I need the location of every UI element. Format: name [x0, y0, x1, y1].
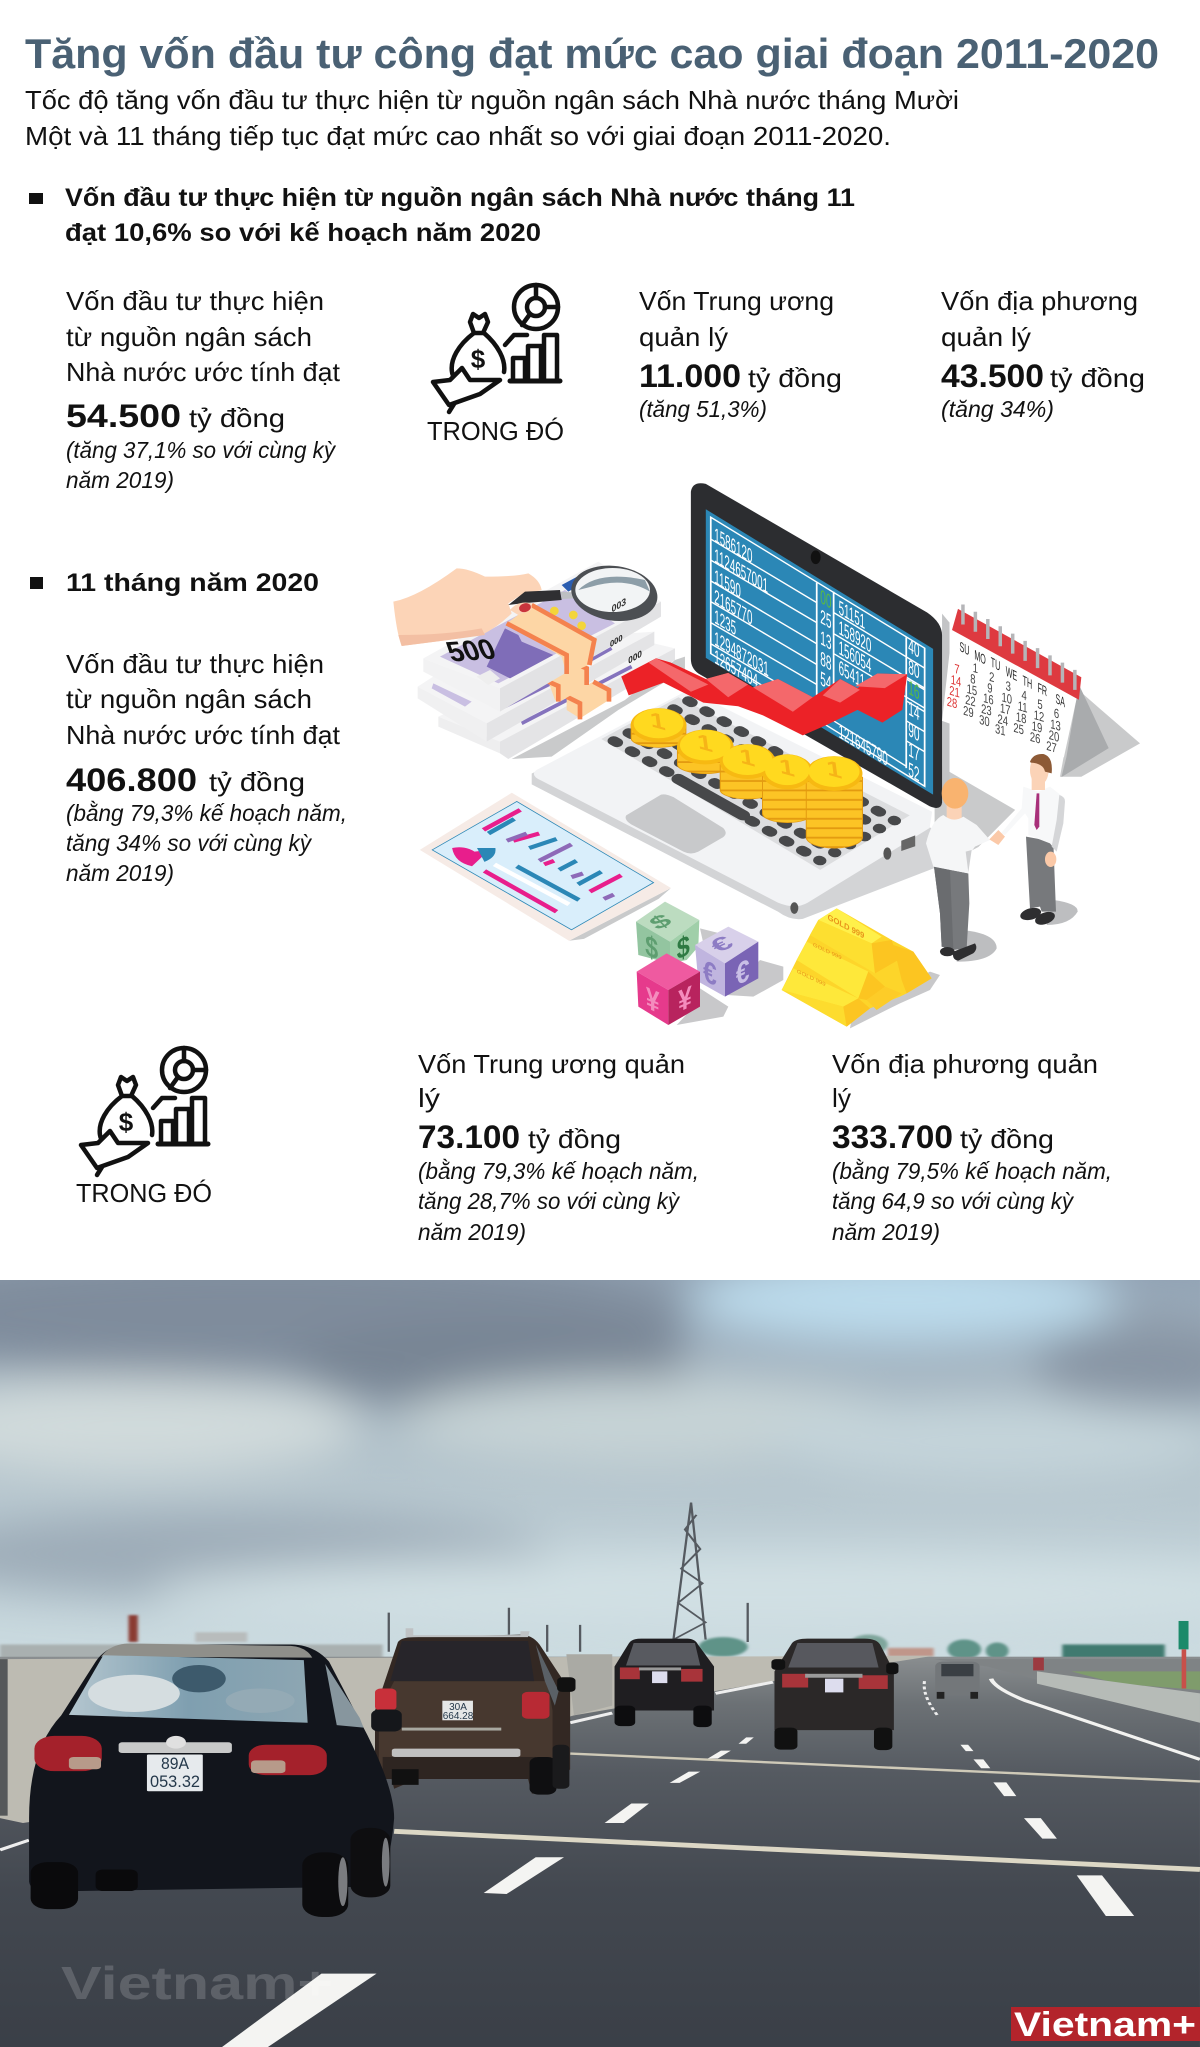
text block: local capital November: (tăng 34%): [941, 396, 1054, 422]
coin stacks: 1: [738, 744, 756, 772]
concrete barrier: [0, 1656, 934, 1823]
coin stacks: 1: [778, 754, 796, 782]
illustration: isometric investment scene: [393, 483, 1140, 1028]
silver car: [935, 1662, 980, 1699]
calendar: 8: [970, 671, 976, 688]
text block: November total: năm 2019): [66, 467, 174, 493]
gold bars: [782, 908, 940, 1028]
laptop screen: 65411: [839, 656, 865, 694]
calendar: MO: [974, 648, 986, 669]
currency cubes: €: [736, 953, 749, 993]
laptop screen: 52: [908, 758, 920, 787]
calendar: 23: [981, 701, 992, 719]
intro text: Một và 11 tháng tiếp tục đạt mức cao nhất so với giai đoạn 2011-2020.: [25, 121, 891, 151]
laptop screen: 1235: [714, 606, 736, 640]
text block: local capital 11 months: 333.700: [832, 1119, 953, 1155]
calendar: 25: [1013, 720, 1024, 738]
laptop screen: 158920: [839, 616, 871, 658]
money stacks with hand and magnifier: [393, 560, 685, 759]
text block: central capital 11 months: năm 2019): [418, 1219, 526, 1245]
laptop screen: 12657404: [714, 646, 758, 693]
section heading: November: [29, 184, 855, 247]
calendar: 18: [1016, 709, 1026, 727]
calendar: 9: [987, 680, 992, 697]
arrow: red rising: [621, 658, 907, 735]
licence plate text: Mercedes: 664.28: [443, 1711, 474, 1722]
pylon and poles: [389, 1503, 748, 1652]
text block: local capital November: tỷ đồng: [1050, 363, 1145, 393]
calendar: 10: [1001, 690, 1012, 708]
text block: 11 months total: (bằng 79,3% kế hoạch năm,: [66, 800, 347, 826]
icon: money and charts (top): $: [471, 344, 486, 374]
calendar: 28: [947, 694, 957, 712]
currency cubes: ¥: [646, 981, 659, 1021]
laptop screen: 25: [820, 606, 831, 634]
text block: local capital November: Vốn địa phương: [941, 286, 1138, 316]
text block: local capital 11 months: tăng 64,9 so với cùng kỳ: [832, 1188, 1074, 1214]
currency cubes: ¥: [678, 980, 692, 1020]
text block: November total: Nhà nước ước tính đạt: [66, 357, 341, 387]
calendar: SA: [1055, 692, 1065, 711]
black toyota: [29, 1643, 402, 1917]
grass and guardrail: [1071, 1671, 1200, 1690]
clouds: [0, 1251, 1200, 1632]
text block: local capital 11 months: lý: [832, 1083, 851, 1113]
laptop screen: [691, 483, 950, 808]
laptop screen: 00: [820, 586, 831, 614]
text block: 11 months total: tăng 34% so với cùng kỳ: [66, 830, 312, 856]
calendar: 4: [1022, 688, 1027, 704]
calendar: 27: [1046, 739, 1057, 756]
text block: November total: tỷ đồng: [189, 403, 285, 433]
calendar: 3: [1006, 679, 1011, 695]
laptop screen: 11590: [714, 566, 741, 603]
calendar: FR: [1038, 681, 1047, 700]
text block: central capital 11 months: [418, 1049, 699, 1245]
text block: central capital November: quản lý: [639, 322, 728, 352]
laptop screen: 40: [908, 635, 920, 663]
calendar: 21: [949, 683, 960, 701]
photo: cars on expressway: [0, 1251, 1200, 2047]
text block: 11 months total: từ nguồn ngân sách: [66, 684, 312, 714]
text block: central capital 11 months: (bằng 79,3% kế hoạch năm,: [418, 1158, 699, 1184]
logo: Vietnam+: Vietnam+: [1014, 2006, 1196, 2044]
calendar: 20: [1049, 728, 1059, 745]
text block: 11 months total: tỷ đồng: [209, 767, 305, 797]
laptop screen: 13: [820, 627, 831, 655]
text block: central capital November: (tăng 51,3%): [639, 396, 767, 422]
text block: central capital 11 months: Vốn Trung ương quản: [418, 1049, 685, 1079]
calendar: 13: [1050, 717, 1061, 734]
calendar: 22: [965, 692, 976, 710]
intro text: [25, 85, 959, 151]
suv centre: [615, 1639, 714, 1727]
licence plate text: Toyota: [150, 1754, 200, 1791]
icon: money and charts (bottom): $: [119, 1107, 134, 1137]
laptop screen: 14: [908, 697, 920, 726]
calendar: 6: [1054, 706, 1059, 722]
text block: local capital 11 months: năm 2019): [832, 1219, 940, 1245]
text block: central capital November: [639, 286, 842, 422]
section heading: November: đạt 10,6% so với kế hoạch năm 2020: [65, 219, 541, 247]
laptop screen: 17: [908, 738, 920, 767]
gold bars: GOLD 999: [812, 943, 842, 962]
laptop screen: 80: [908, 656, 920, 684]
horizon trees and buildings: [0, 1615, 1165, 1661]
laptop screen: 1294872031: [714, 627, 769, 682]
label: TRONG ĐÓ (top): TRONG ĐÓ: [427, 416, 564, 446]
text block: central capital 11 months: tỷ đồng: [528, 1124, 621, 1154]
text block: 11 months total: Nhà nước ước tính đạt: [66, 720, 341, 750]
gold bars: GOLD 999: [827, 912, 865, 941]
laptop screen: 1586120: [714, 524, 752, 568]
currency cubes: €: [704, 931, 739, 956]
calendar: 14: [951, 672, 962, 690]
money stacks with hand and magnifier: 000: [628, 648, 642, 666]
laptop screen: 2165770: [714, 586, 752, 630]
calendar: 16: [983, 691, 994, 708]
licence plate text: Toyota: 053.32: [150, 1772, 200, 1791]
currency cubes: €: [703, 954, 717, 994]
text block: November total: 54.500: [66, 398, 181, 434]
text block: central capital November: 11.000: [639, 358, 741, 394]
road markings: [0, 1679, 1200, 1869]
text block: central capital 11 months: tăng 28,7% so với cùng kỳ: [418, 1188, 680, 1214]
laptop screen: 1124657001: [714, 544, 768, 598]
licence plate text: Toyota: 89A: [161, 1754, 190, 1773]
laptop screen: 156054: [839, 636, 871, 678]
brown suv: [375, 1628, 576, 1795]
laptop screen: 54: [820, 667, 831, 696]
calendar: TH: [1023, 673, 1032, 693]
calendar: 19: [1032, 719, 1042, 736]
label: TRONG ĐÓ (bottom): TRONG ĐÓ: [76, 1178, 212, 1208]
money stacks with hand and magnifier: 000: [610, 632, 623, 649]
watermark: Vietnam+: [61, 1957, 333, 2009]
calendar: [942, 604, 1109, 777]
laptop screen: 88: [820, 647, 831, 676]
coin stacks: 1: [825, 756, 843, 784]
text block: 11 months total: Vốn đầu tư thực hiện: [66, 649, 324, 679]
coin stacks: 1: [648, 707, 667, 736]
text block: November total: Vốn đầu tư thực hiện: [66, 286, 324, 316]
text block: November total: (tăng 37,1% so với cùng kỳ: [66, 437, 336, 463]
calendar: 1: [973, 660, 978, 677]
text block: central capital November: Vốn Trung ương: [639, 286, 834, 316]
calendar: 2: [989, 669, 994, 686]
text block: 11 months total: 406.800: [66, 762, 197, 798]
text block: 11 months total: [66, 649, 347, 886]
licence plate text: Mercedes: 30A: [449, 1702, 467, 1713]
icon: money and charts (top): [433, 285, 560, 412]
calendar: WE: [1006, 664, 1017, 685]
tablet with charts: [420, 793, 671, 941]
suv right: [771, 1639, 898, 1750]
money stacks with hand and magnifier: 003: [612, 596, 627, 616]
laptop screen: 16: [908, 677, 920, 705]
title: Tăng vốn đầu tư công đạt mức cao giai đoạn 2011-2020: [25, 30, 1159, 77]
calendar: 15: [967, 681, 977, 699]
icon: money and charts (bottom): [81, 1048, 208, 1175]
text block: local capital 11 months: tỷ đồng: [960, 1124, 1054, 1154]
calendar: 5: [1037, 697, 1043, 713]
text block: central capital 11 months: lý: [418, 1083, 440, 1113]
text block: 11 months total: năm 2019): [66, 860, 174, 886]
currency cubes: $: [644, 910, 677, 934]
calendar: 12: [1034, 708, 1044, 725]
calendar: 31: [995, 721, 1006, 739]
licence plate text: Mercedes: [443, 1702, 474, 1722]
text block: November total: từ nguồn ngân sách: [66, 322, 312, 352]
text block: central capital 11 months: 73.100: [418, 1119, 520, 1155]
text block: November total: [66, 286, 341, 493]
calendar: 29: [963, 703, 974, 721]
text block: local capital 11 months: [832, 1049, 1112, 1245]
laptop with shadows: [532, 483, 1140, 941]
text block: central capital November: tỷ đồng: [748, 363, 842, 393]
money stacks with hand and magnifier: 500: [442, 634, 501, 668]
calendar: TU: [991, 655, 1000, 675]
currency cubes: [636, 902, 783, 1025]
calendar: SU: [959, 640, 969, 659]
calendar: 7: [954, 661, 960, 678]
calendar: 17: [1000, 701, 1010, 718]
text block: local capital November: 43.500: [941, 358, 1044, 394]
gold bars: GOLD 999: [796, 969, 827, 988]
laptop screen: 121645790: [839, 720, 888, 771]
laptop screen: 51151: [839, 596, 865, 634]
calendar: 24: [997, 712, 1008, 730]
calendar: 26: [1030, 729, 1040, 747]
businessman left: [926, 778, 997, 962]
laptop screen: 90: [908, 718, 920, 747]
businessman right: [989, 754, 1078, 927]
calendar: 30: [979, 712, 990, 730]
coin stacks: 1: [696, 729, 714, 758]
text block: local capital November: quản lý: [941, 322, 1031, 352]
text block: local capital 11 months: Vốn địa phương quản: [832, 1049, 1098, 1079]
intro text: Tốc độ tăng vốn đầu tư thực hiện từ nguồn ngân sách Nhà nước tháng Mười: [25, 85, 959, 115]
section heading: November: Vốn đầu tư thực hiện từ nguồn ngân sách Nhà nước tháng 11: [65, 184, 855, 212]
coin stacks: [631, 707, 862, 848]
road: [0, 1657, 1200, 2047]
currency cubes: $: [677, 928, 690, 967]
section heading: 11 months: 11 tháng năm 2020: [66, 569, 319, 597]
calendar: 11: [1018, 699, 1028, 716]
text block: local capital 11 months: (bằng 79,5% kế hoạch năm,: [832, 1158, 1112, 1184]
text block: local capital November: [941, 286, 1145, 422]
currency cubes: $: [645, 928, 658, 967]
